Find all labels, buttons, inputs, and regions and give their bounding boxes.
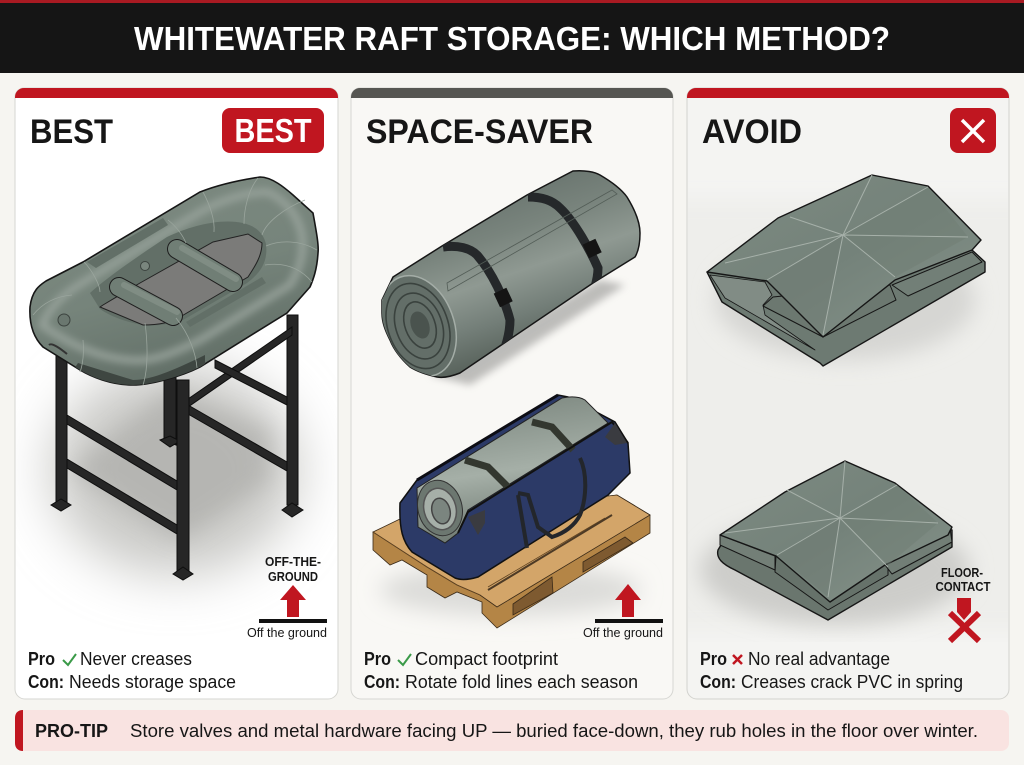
icon: off-the-ground arrow: GROUND (268, 569, 318, 584)
icon: off-the-ground arrow (583, 584, 663, 640)
icon: floor-contact warning: CONTACT (936, 579, 991, 594)
pro and con (28, 649, 236, 692)
pro and con: Pro (700, 649, 727, 669)
floor shadow (380, 280, 640, 616)
pro-tip banner (15, 710, 1009, 751)
badge: avoid x (950, 108, 996, 153)
heading: AVOID (702, 113, 802, 151)
pro and con: Con: (28, 672, 64, 692)
icon: folded raft lower (718, 461, 952, 620)
panel: space-saver (351, 88, 673, 699)
icon: off-the-ground arrow (247, 554, 327, 640)
pro and con (364, 649, 638, 692)
icon: off-the-ground arrow: Off the ground (247, 625, 327, 640)
floor shadow (688, 250, 990, 635)
pro and con: Compact footprint (415, 649, 558, 669)
title banner: WHITEWATER RAFT STORAGE: WHICH METHOD? (134, 20, 890, 57)
heading: SPACE-SAVER (366, 113, 593, 151)
pro and con: Needs storage space (69, 672, 236, 692)
icon: metal stand (51, 315, 303, 580)
pro and con: Con: (700, 672, 736, 692)
icon: rolled raft with straps (366, 171, 640, 387)
pro and con: Creases crack PVC in spring (741, 672, 963, 692)
pro and con: Rotate fold lines each season (405, 672, 638, 692)
icon: wooden pallet (373, 495, 650, 628)
pro-tip banner: PRO-TIP (35, 721, 108, 741)
icon: off-the-ground arrow: OFF-THE- (265, 554, 321, 569)
icon: inflatable raft (30, 177, 318, 392)
pro and con (700, 649, 963, 692)
pro and con: Pro (364, 649, 391, 669)
pro-tip banner: Store valves and metal hardware facing UP — buried face-down, they rub holes in the floor over winter. (130, 721, 978, 741)
pro and con: Never creases (80, 649, 192, 669)
badge: best: BEST (234, 112, 312, 149)
pro and con: Pro (28, 649, 55, 669)
icon: off-the-ground arrow: Off the ground (583, 625, 663, 640)
heading: BEST (30, 113, 113, 151)
panel: best (15, 88, 338, 699)
icon: floor-contact warning (936, 565, 991, 641)
icon: folded raft upper (707, 175, 985, 366)
pro and con: No real advantage (748, 649, 890, 669)
title banner (0, 0, 1024, 73)
pro and con: Con: (364, 672, 400, 692)
icon: floor-contact warning: FLOOR- (941, 565, 983, 580)
floor shadow (50, 365, 300, 575)
icon: duffel bag with rolled raft (400, 395, 630, 579)
panel: avoid (686, 88, 1010, 700)
